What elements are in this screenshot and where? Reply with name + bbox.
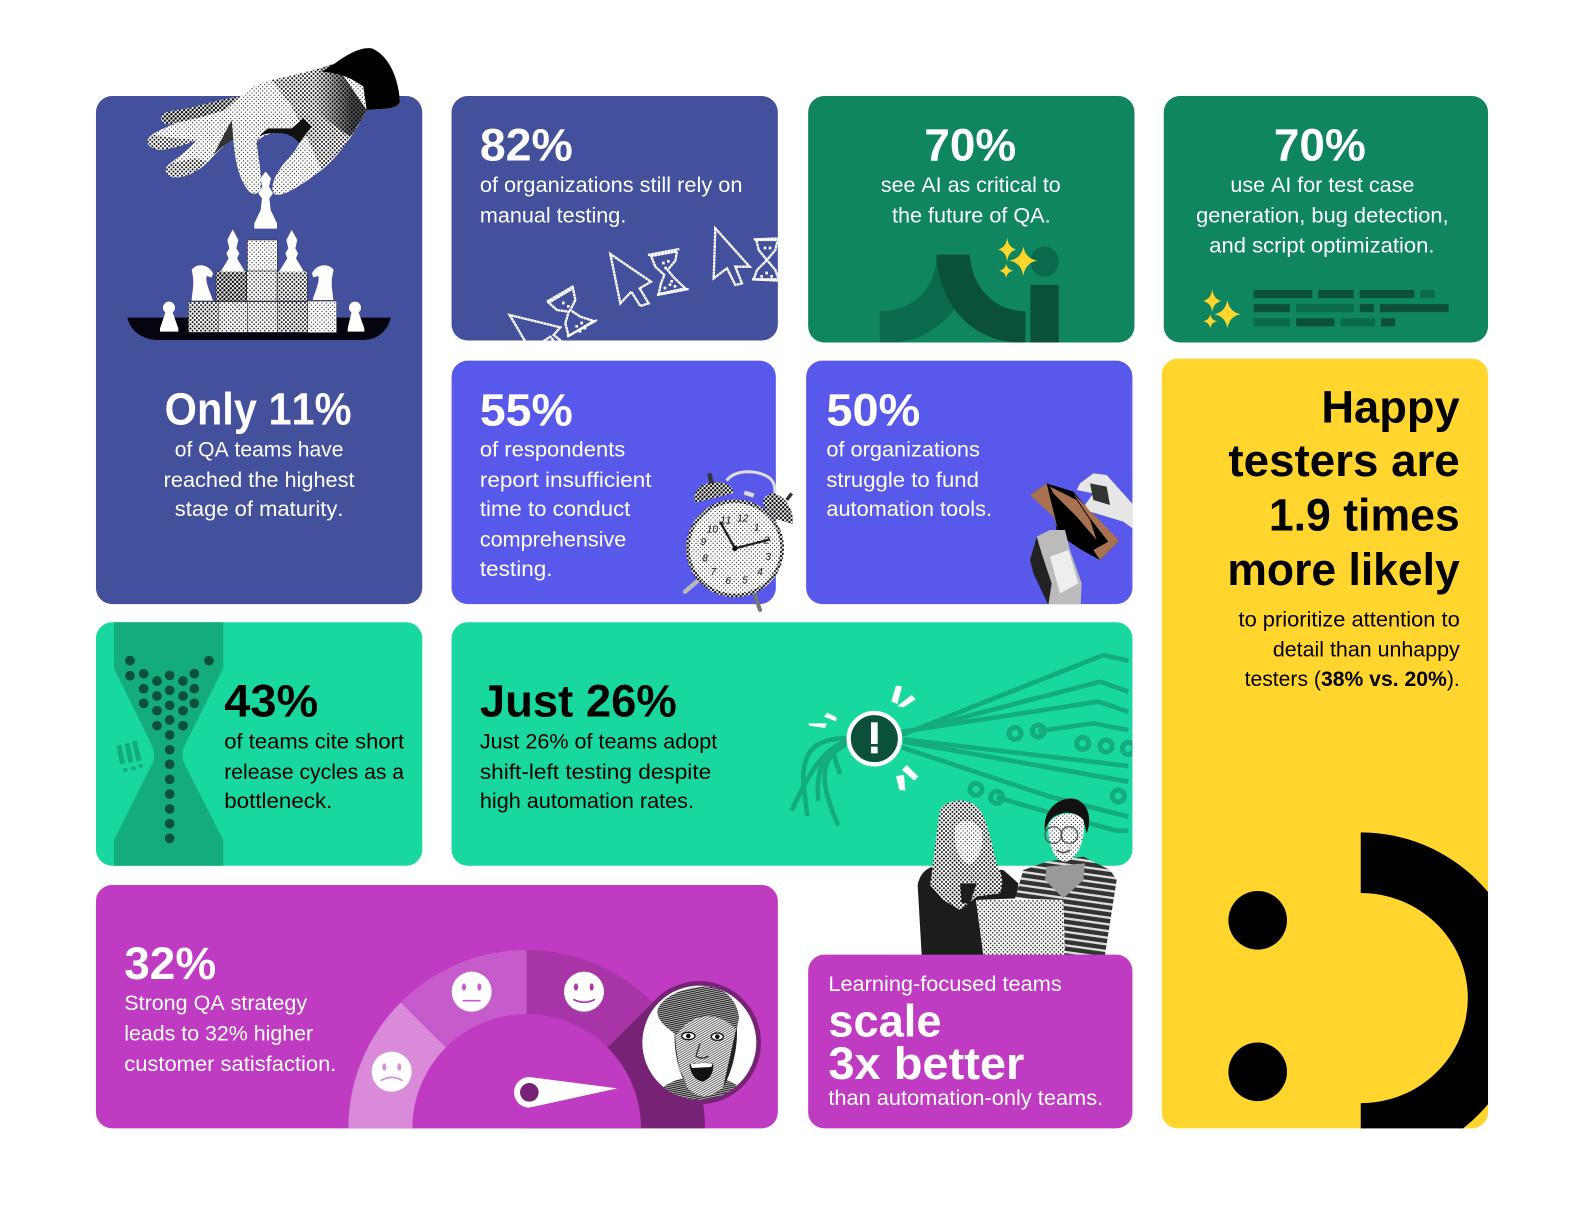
icon: hourglass with dots — [114, 620, 223, 868]
woman left — [918, 801, 1018, 955]
body text: and script optimization. — [1209, 235, 1434, 258]
body text: manual testing. — [480, 204, 626, 227]
chess pieces — [160, 229, 364, 332]
body text: release cycles as a — [224, 761, 404, 784]
panel: 50% fund automation — [806, 361, 1135, 607]
body text — [480, 731, 717, 813]
closing line: than automation-only teams. — [828, 1087, 1103, 1110]
icon: empty wallet and hands — [1030, 473, 1135, 607]
body text: testers (38% vs. 20%). — [1245, 668, 1460, 691]
body text: of organizations still rely on — [480, 174, 742, 197]
icon: neutral face — [452, 972, 492, 1012]
chart: satisfaction gauge — [348, 950, 761, 1128]
heading: happy testers — [1227, 381, 1460, 595]
body text: Strong QA strategy — [124, 992, 308, 1015]
icon: alarm clock: 10 — [707, 525, 718, 536]
icon: alarm clock: 4 — [757, 567, 763, 578]
chess king — [254, 172, 277, 229]
heading: scale 3x better: 3x better — [828, 1038, 1024, 1089]
icon: spark marks — [808, 686, 918, 791]
icon: smiley face — [1228, 832, 1488, 1128]
laptop — [976, 900, 1065, 955]
card background — [806, 361, 1132, 604]
body text: of organizations — [826, 439, 980, 462]
body text: leads to 32% higher — [124, 1023, 313, 1046]
panel: 70% AI critical — [808, 96, 1134, 342]
card background — [808, 96, 1134, 342]
body text: automation tools. — [826, 498, 992, 521]
body text: to prioritize attention to — [1239, 608, 1460, 631]
icon: alert circle — [849, 713, 900, 764]
body text — [480, 174, 742, 227]
card background — [96, 96, 422, 604]
icon: sad face — [372, 1052, 412, 1092]
card background — [452, 622, 1132, 866]
icon: code lines — [1254, 290, 1449, 326]
icon: cursors and hourglasses — [510, 228, 780, 350]
gauge needle — [514, 1077, 617, 1108]
stat: 70%: 70% — [924, 120, 1016, 171]
body text: struggle to fund — [826, 469, 979, 492]
icon: sparkles — [998, 237, 1037, 278]
body text: high automation rates. — [480, 790, 694, 813]
heading: happy testers: testers are — [1228, 435, 1460, 486]
panel: just 26% shift-left — [452, 622, 1134, 866]
stat: just 26%: Just 26% — [480, 675, 677, 726]
tray — [127, 318, 391, 340]
woman right — [1015, 798, 1117, 955]
panel: 55% insufficient time — [452, 361, 793, 610]
icon: alarm clock: 6 — [726, 576, 732, 587]
icon: alarm clock: 11 — [720, 515, 731, 526]
icon: alarm clock — [685, 472, 793, 610]
body text: use AI for test case — [1230, 174, 1414, 197]
card background — [1162, 359, 1488, 1128]
body text: detail than unhappy — [1273, 639, 1460, 662]
card background — [452, 96, 778, 340]
block pyramid — [188, 240, 337, 333]
heading: happy testers: more likely — [1227, 544, 1460, 595]
body text — [1239, 608, 1460, 691]
body text: of respondents — [480, 439, 625, 462]
panel: 32% customer satisfaction — [96, 885, 778, 1128]
body text: comprehensive — [480, 529, 626, 552]
body text: Just 26% of teams adopt — [480, 731, 717, 754]
body text — [164, 439, 355, 521]
heading: scale 3x better — [828, 995, 1024, 1089]
icon: alarm clock: 12 — [737, 514, 749, 525]
icon: hand placing chess king on blocks — [127, 48, 400, 340]
body text: the future of QA. — [892, 204, 1051, 227]
panel: 70% use AI — [1164, 96, 1488, 342]
body text — [124, 992, 336, 1076]
icon: alarm clock: 8 — [702, 554, 708, 565]
body text — [224, 731, 404, 813]
heading: only 11%: Only 11% — [165, 383, 352, 434]
body text: generation, bug detection, — [1196, 204, 1449, 227]
card background — [96, 885, 778, 1128]
body text: testing. — [480, 558, 553, 581]
icon: alarm clock: 3 — [766, 552, 772, 563]
body text: shift-left testing despite — [480, 761, 711, 784]
body text — [826, 439, 992, 521]
icon: sparkles — [1203, 289, 1241, 328]
panel: 43% release cycles — [96, 620, 422, 868]
body text: report insufficient — [480, 469, 652, 492]
body text: see AI as critical to — [881, 174, 1061, 197]
panel: learning-focused teams — [808, 955, 1132, 1128]
chart: circuit lines with alert — [792, 655, 1134, 831]
panel: only 11% maturity — [96, 48, 422, 604]
icon: two people at a laptop — [918, 798, 1117, 955]
body text: of QA teams have — [175, 439, 343, 462]
icon: alarm clock: 1 — [754, 523, 759, 534]
card background — [1164, 96, 1488, 342]
panel: happy testers — [1162, 358, 1488, 1128]
stat: 32%: 32% — [124, 938, 216, 989]
card background — [452, 361, 776, 604]
body text: bottleneck. — [224, 790, 332, 813]
panel: 82% manual testing — [452, 96, 780, 350]
body text — [1196, 174, 1449, 258]
body text: customer satisfaction. — [124, 1053, 336, 1076]
stat: 70%: 70% — [1274, 120, 1366, 171]
body text: time to conduct — [480, 498, 630, 521]
body text: stage of maturity. — [175, 498, 343, 521]
hand — [148, 48, 400, 195]
card background — [808, 955, 1132, 1128]
body text — [480, 439, 652, 581]
icon: AI letters — [880, 247, 1059, 342]
heading: scale 3x better: scale — [828, 995, 942, 1046]
heading: happy testers: Happy — [1321, 381, 1460, 432]
body text: of teams cite short — [224, 731, 404, 754]
stat: 55%: 55% — [480, 384, 573, 435]
icon: alarm clock: 5 — [742, 575, 748, 586]
body text — [881, 174, 1061, 227]
stat: 50%: 50% — [826, 384, 920, 435]
stat: 82%: 82% — [480, 120, 573, 171]
card background — [96, 622, 422, 866]
heading: happy testers: 1.9 times — [1269, 489, 1460, 540]
body text: reached the highest — [164, 469, 355, 492]
icon: exclamation marks — [119, 741, 143, 770]
portrait: excited man — [638, 981, 761, 1104]
icon: alarm clock: 7 — [711, 567, 717, 578]
stat: 43%: 43% — [224, 675, 318, 726]
intro line: Learning-focused teams — [828, 973, 1062, 996]
icon: happy face — [564, 972, 604, 1012]
icon: alarm clock: 2 — [763, 535, 770, 546]
icon: alarm clock: 9 — [701, 537, 707, 548]
